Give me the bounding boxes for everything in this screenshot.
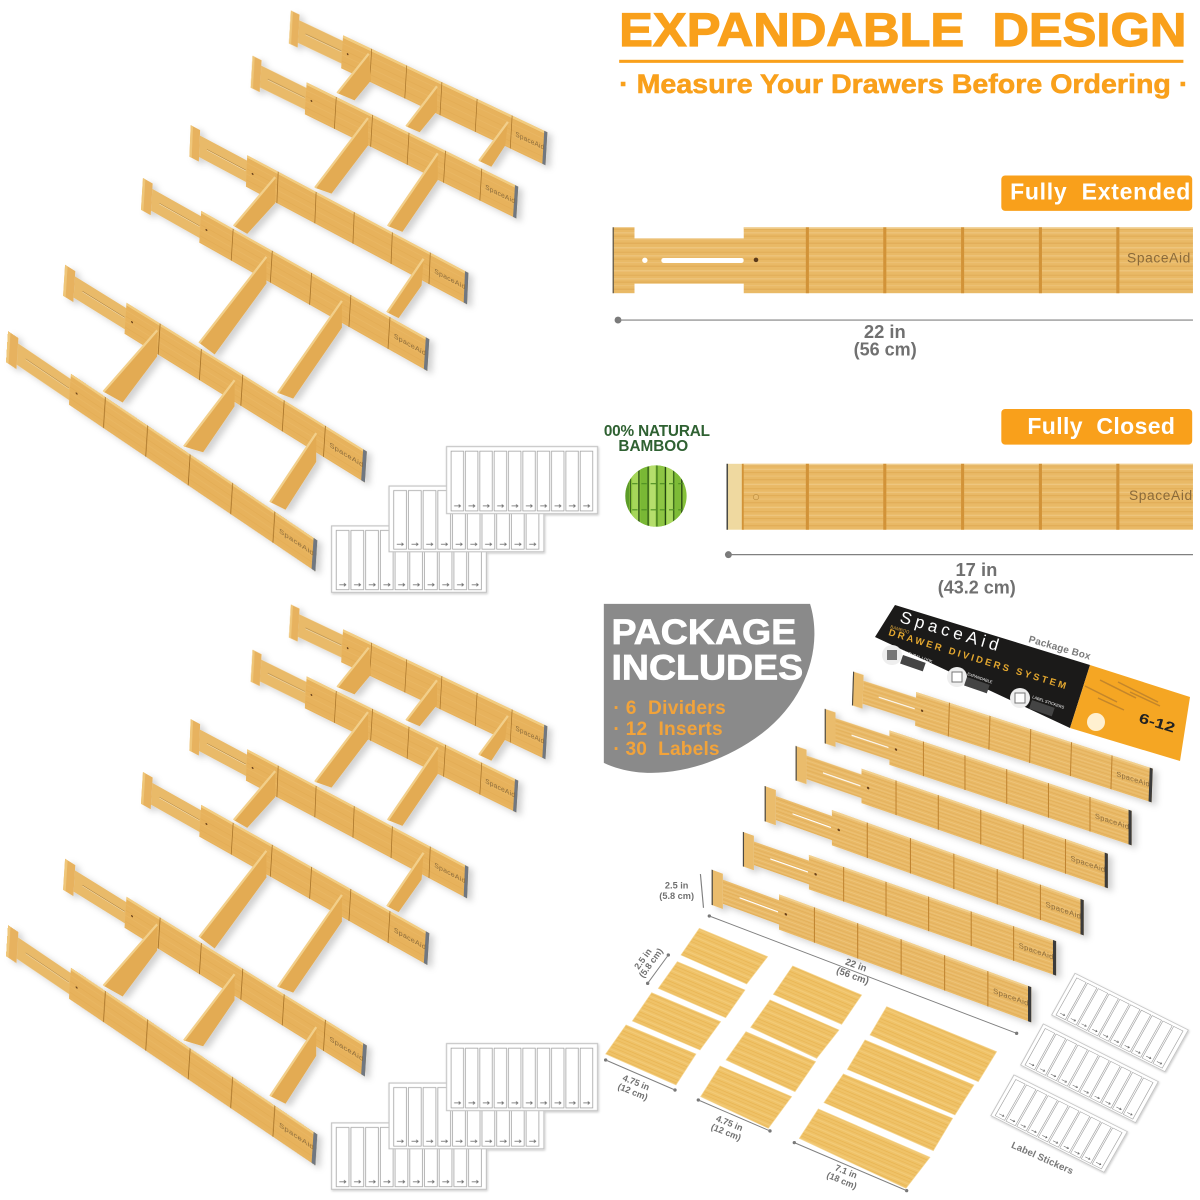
package box: LABEL STICKERS [1032, 694, 1065, 710]
dimension: 22 in length: 22 in [844, 957, 868, 975]
divider 4 [141, 772, 429, 965]
divider 2: SpaceAid [485, 778, 515, 799]
divider 1: SpaceAid [1116, 769, 1150, 789]
divider 4 [141, 178, 429, 371]
heading [611, 613, 803, 687]
divider: fully closed [726, 464, 1195, 530]
divider: fully closed: SpaceAid [1129, 488, 1192, 503]
divider 4: SpaceAid [394, 331, 426, 358]
package box: DRAWER DIVIDERS SYSTEM [887, 627, 1067, 692]
divider 1 [289, 10, 547, 165]
subtitle: · Measure Your Drawers Before Ordering · [619, 69, 1188, 99]
bamboo label [604, 423, 710, 455]
dimension: 4.75 in middle [697, 1098, 772, 1143]
inserts row 5 [103, 924, 316, 1104]
package box: EXPANDABLE [967, 671, 994, 685]
divider 5: SpaceAid [329, 1035, 363, 1063]
heading: PACKAGE [611, 613, 796, 652]
divider 3 [189, 125, 468, 304]
label: package box: Package Box [1027, 634, 1092, 663]
label stickers in package [991, 973, 1188, 1177]
divider 2: SpaceAid [485, 184, 515, 205]
insert boards and dimensions [604, 914, 1018, 1192]
label sheets bottom-left [332, 1044, 598, 1189]
divider 2 [251, 650, 518, 813]
bamboo label: BAMBOO [618, 438, 688, 455]
inserts row 2 [315, 712, 438, 826]
divider 5 [63, 265, 367, 483]
divider 2 [251, 56, 518, 219]
inserts row 5 [103, 330, 316, 510]
label sheets top-left [332, 447, 598, 592]
dimension: divider height 2.5 in: (5.8 cm) [659, 891, 694, 901]
dimension: insert width: (5.8 cm) [637, 946, 665, 980]
divider 6: SpaceAid [279, 1121, 314, 1152]
divider 5: SpaceAid [329, 441, 363, 469]
dimension: 4.75 in left: 4.75 in [621, 1073, 651, 1092]
package box: SpaceAid [898, 608, 1001, 655]
heading: INCLUDES [611, 648, 803, 687]
divider 3: SpaceAid [1071, 854, 1105, 874]
icon: bamboo circle [625, 465, 687, 527]
badge: fully closed: Fully Closed [1027, 413, 1175, 439]
panel: assembled dividers top-left [6, 10, 547, 571]
divider 6: SpaceAid [279, 527, 314, 558]
inserts row 1 [337, 54, 508, 167]
contents list: · 6 Dividers [613, 698, 726, 719]
divider 3 [189, 719, 468, 898]
caption: Label Stickers [1009, 1140, 1075, 1177]
divider 6 [6, 925, 317, 1165]
dimension: 17 in: 17 in [955, 559, 997, 580]
contents list [613, 698, 726, 760]
contents list: · 30 Labels [613, 739, 720, 760]
dimension: 7.1 in: (18 cm) [825, 1170, 858, 1191]
divider 6 [6, 331, 317, 571]
divider 6 [712, 870, 1031, 1022]
package box: 6-12 [1137, 710, 1177, 736]
dimension: 4.75 in left [604, 1058, 677, 1102]
dimension: 22 in: (56 cm) [854, 340, 917, 360]
badge: fully closed [1001, 409, 1192, 445]
divider 4: SpaceAid [1046, 900, 1081, 921]
inserts column 1 [606, 928, 768, 1085]
inserts row 3 [234, 771, 424, 912]
panel: expandable design [604, 4, 1195, 597]
dimension: 22 in: 22 in [864, 321, 906, 342]
dimension: divider height 2.5 in: 2.5 in [665, 881, 689, 891]
sticker sheets [991, 973, 1188, 1172]
badge: fully extended [1001, 176, 1192, 211]
divider 4 [765, 786, 1084, 935]
dimension: 22 in length: (56 cm) [835, 965, 870, 987]
bamboo label: 00% NATURAL [604, 423, 710, 440]
panel: package includes [604, 604, 814, 773]
divider 1 [289, 604, 547, 759]
inserts row 2 [315, 118, 438, 232]
dimension: 22 in length [708, 914, 1018, 1035]
badge: fully extended: Fully Extended [1010, 179, 1190, 205]
title rule [619, 60, 1183, 63]
inserts column 3 [799, 1007, 997, 1188]
title: EXPANDABLE DESIGN [619, 4, 1186, 57]
divider 3 [796, 746, 1108, 888]
dimension: insert width: 2.5 in [632, 947, 654, 971]
divider 5 [63, 859, 367, 1077]
dimension: 4.75 in middle: (12 cm) [710, 1122, 743, 1143]
inserts row 1 [337, 648, 508, 761]
dimension: 17 in: (43.2 cm) [938, 577, 1016, 597]
divider 6: SpaceAid [993, 986, 1028, 1008]
dimension: 4.75 in left: (12 cm) [616, 1081, 649, 1102]
divider 1: SpaceAid [515, 131, 544, 152]
dimension: divider height 2.5 in [659, 874, 703, 908]
panel: assembled dividers bottom-left [6, 604, 547, 1165]
inserts row 4 [199, 851, 342, 993]
inserts row 4 [199, 257, 342, 399]
divider 5: SpaceAid [1019, 941, 1053, 962]
divider 1: SpaceAid [515, 725, 544, 746]
dimension: 17 in [725, 551, 1193, 597]
dimension: 4.75 in middle: 4.75 in [715, 1113, 744, 1133]
divider 4: SpaceAid [394, 925, 426, 952]
divider 3: SpaceAid [434, 267, 465, 291]
divider 2 [825, 709, 1132, 845]
inserts row 3 [234, 177, 424, 318]
divider: fully extended: SpaceAid [1127, 251, 1190, 266]
six dividers in package [712, 672, 1153, 1022]
divider: fully extended [613, 227, 1195, 293]
dimension: 7.1 in [793, 1141, 908, 1192]
inserts column 2 [701, 966, 862, 1128]
grey badge shape [604, 604, 814, 773]
divider 3: SpaceAid [434, 861, 465, 885]
package box [875, 605, 1190, 761]
dimension: 7.1 in: 7.1 in [834, 1163, 859, 1180]
dimension: 22 in [615, 317, 1193, 360]
divider 5 [743, 832, 1056, 976]
package box: BAMBOO [890, 624, 911, 635]
package box: NATURAL LOOK [903, 649, 933, 664]
dimension: insert width [632, 946, 670, 985]
divider 1 [852, 672, 1153, 802]
contents list: · 12 Inserts [613, 719, 723, 740]
divider 2: SpaceAid [1095, 811, 1129, 831]
